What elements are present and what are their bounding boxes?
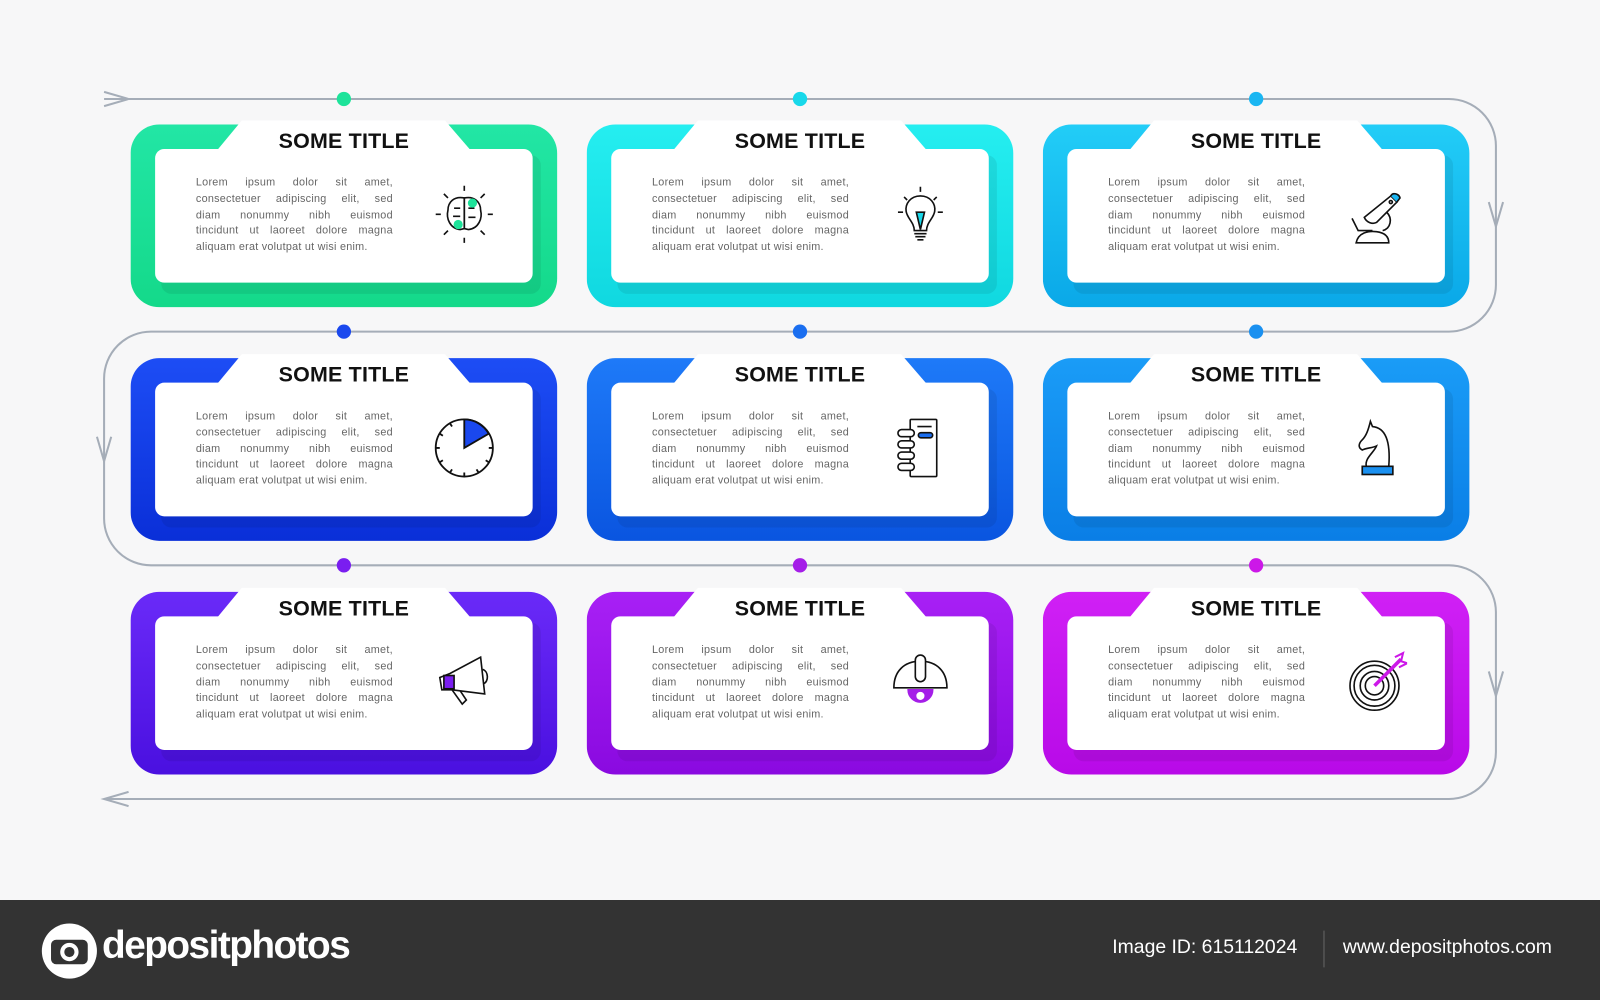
panel: card 8 — [586, 592, 1014, 774]
text block: aliquam erat volutpat ut wisi enim. — [1108, 708, 1280, 721]
heading: SOME TITLE — [1191, 363, 1321, 387]
footer bar — [0, 900, 1600, 1000]
text block: tincidunt ut laoreet dolore magna — [652, 459, 849, 471]
text block: diam nonummy nibh euismod — [652, 442, 849, 455]
heading: SOME TITLE — [279, 130, 409, 153]
text block: aliquam erat volutpat ut wisi enim. — [196, 241, 368, 253]
icon: notebook — [897, 418, 938, 478]
heading: SOME TITLE — [279, 597, 409, 620]
text block: consectetuer adipiscing elit, sed — [652, 660, 849, 672]
text block: tincidunt ut laoreet dolore magna — [652, 225, 849, 237]
text block: diam nonummy nibh euismod — [1108, 676, 1305, 688]
image id text: Image ID: 615112024 — [1112, 937, 1297, 958]
panel: card 5 — [586, 358, 1014, 541]
text block: consectetuer adipiscing elit, sed — [196, 660, 393, 672]
icon: light bulb — [898, 186, 943, 241]
text block: consectetuer adipiscing elit, sed — [196, 426, 393, 439]
text block: tincidunt ut laoreet dolore magna — [1108, 225, 1305, 237]
logo — [42, 924, 350, 979]
text block: aliquam erat volutpat ut wisi enim. — [1108, 241, 1280, 253]
text block: Lorem ipsum dolor sit amet, — [196, 644, 393, 656]
text block: Lorem ipsum dolor sit amet, — [1108, 644, 1305, 656]
text block — [1108, 644, 1305, 721]
text block: consectetuer adipiscing elit, sed — [1108, 660, 1305, 672]
text block — [196, 410, 393, 487]
text block: Lorem ipsum dolor sit amet, — [652, 410, 849, 422]
text block: aliquam erat volutpat ut wisi enim. — [196, 708, 368, 721]
heading: SOME TITLE — [279, 363, 409, 387]
icon: microscope — [1351, 192, 1401, 244]
panel: card 1 — [130, 124, 558, 308]
icon: brain — [436, 186, 493, 243]
heading: SOME TITLE — [1191, 130, 1321, 153]
text block: diam nonummy nibh euismod — [196, 676, 393, 688]
text block: tincidunt ut laoreet dolore magna — [196, 692, 393, 704]
heading: SOME TITLE — [735, 130, 865, 153]
icon: helmet gear — [893, 654, 948, 703]
text block: tincidunt ut laoreet dolore magna — [196, 459, 393, 471]
text block: diam nonummy nibh euismod — [652, 676, 849, 688]
icon: clock — [434, 418, 494, 478]
text block: Lorem ipsum dolor sit amet, — [652, 644, 849, 656]
icon: chess knight — [1358, 418, 1394, 476]
text block — [1108, 177, 1305, 253]
text block: consectetuer adipiscing elit, sed — [1108, 193, 1305, 205]
icon: target — [1349, 651, 1408, 711]
panel: card 3 — [1042, 124, 1470, 308]
heading: SOME TITLE — [1191, 597, 1321, 620]
text block — [652, 644, 849, 721]
text block: consectetuer adipiscing elit, sed — [196, 193, 393, 205]
text block: aliquam erat volutpat ut wisi enim. — [1108, 475, 1280, 487]
panel: card 7 — [130, 592, 558, 774]
text block: diam nonummy nibh euismod — [1108, 209, 1305, 221]
panel: card 4 — [130, 358, 558, 541]
heading: SOME TITLE — [735, 597, 865, 620]
text block: tincidunt ut laoreet dolore magna — [196, 225, 393, 237]
text block: diam nonummy nibh euismod — [196, 442, 393, 455]
text block — [1108, 410, 1305, 487]
text block: tincidunt ut laoreet dolore magna — [652, 692, 849, 704]
text block: aliquam erat volutpat ut wisi enim. — [652, 475, 824, 487]
text block: consectetuer adipiscing elit, sed — [652, 193, 849, 205]
text block: Lorem ipsum dolor sit amet, — [1108, 177, 1305, 189]
heading: SOME TITLE — [735, 363, 865, 387]
logo: depositphotos — [102, 924, 349, 967]
text block: diam nonummy nibh euismod — [196, 209, 393, 221]
text block: tincidunt ut laoreet dolore magna — [1108, 459, 1305, 471]
text block — [196, 644, 393, 721]
icon: megaphone — [438, 656, 488, 706]
text block: Lorem ipsum dolor sit amet, — [652, 177, 849, 189]
text block: consectetuer adipiscing elit, sed — [652, 426, 849, 439]
text block: aliquam erat volutpat ut wisi enim. — [652, 708, 824, 721]
text block: consectetuer adipiscing elit, sed — [1108, 426, 1305, 439]
text block — [652, 177, 849, 253]
website: www.depositphotos.com — [1343, 937, 1552, 958]
text block — [652, 410, 849, 487]
text block — [196, 177, 393, 253]
text block: Lorem ipsum dolor sit amet, — [196, 410, 393, 422]
panel: card 2 — [586, 124, 1014, 308]
text block: diam nonummy nibh euismod — [652, 209, 849, 221]
text block: aliquam erat volutpat ut wisi enim. — [652, 241, 824, 253]
text block: diam nonummy nibh euismod — [1108, 442, 1305, 455]
text block: aliquam erat volutpat ut wisi enim. — [196, 475, 368, 487]
panel: card 9 — [1042, 592, 1470, 774]
panel: card 6 — [1042, 358, 1470, 541]
text block: Lorem ipsum dolor sit amet, — [196, 177, 393, 189]
text block: tincidunt ut laoreet dolore magna — [1108, 692, 1305, 704]
text block: Lorem ipsum dolor sit amet, — [1108, 410, 1305, 422]
